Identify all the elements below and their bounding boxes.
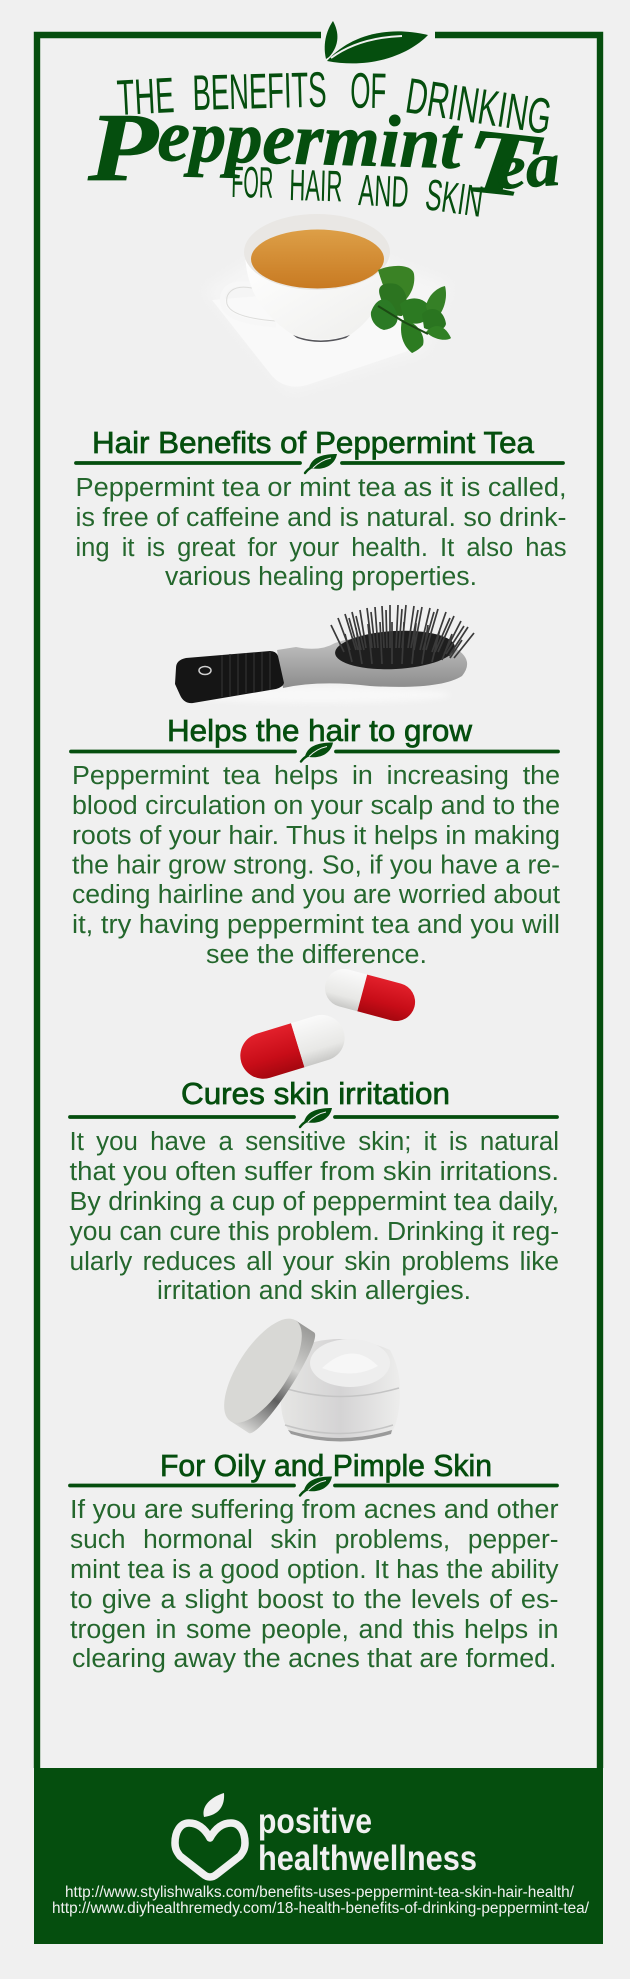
heading: hair growth: Helps the hair to grow bbox=[167, 714, 473, 748]
illustration: cream jar bbox=[209, 1307, 400, 1442]
divider: skin irritation bbox=[70, 1108, 557, 1127]
illustration: tea cup with mint bbox=[205, 214, 451, 392]
text block: oily skin: If you are suffering from acnes and other bbox=[70, 1496, 559, 1524]
grip ribs bbox=[222, 652, 270, 697]
title line 1: OF bbox=[350, 63, 387, 119]
title line 2: script: P bbox=[87, 94, 159, 202]
text block: hair growth bbox=[72, 762, 560, 969]
text block: oily skin: clearing away the acnes that are formed. bbox=[72, 1645, 556, 1673]
brush grip bbox=[175, 651, 284, 703]
brush cushion bbox=[334, 628, 456, 672]
source links bbox=[52, 1884, 590, 1917]
text block: hair growth: ceding hairline and you are worried about bbox=[72, 881, 560, 909]
text block: oily skin: such hormonal skin problems, pepper- bbox=[70, 1526, 558, 1554]
title line 2: script: eppermint bbox=[157, 95, 464, 185]
title line 2: script: T bbox=[460, 108, 547, 218]
text block: hair benefits: is free of caffeine and is natural. so drink- bbox=[76, 504, 566, 532]
text block: oily skin: mint tea is a good option. It has the ability bbox=[70, 1556, 559, 1584]
icon: apple heart logo bbox=[175, 1793, 245, 1877]
text block: oily skin bbox=[70, 1496, 559, 1673]
text block: hair growth: Peppermint tea helps in increasing the bbox=[72, 762, 560, 790]
logo wordmark bbox=[258, 1802, 477, 1878]
title line 2: script bbox=[87, 94, 562, 218]
bristles bbox=[331, 605, 474, 664]
heading: oily skin: For Oily and Pimple Skin bbox=[160, 1449, 492, 1483]
text block: hair growth: blood circulation on your scalp and to the bbox=[72, 792, 560, 820]
saucer bbox=[205, 230, 450, 392]
text block: skin irritation: ularly reduces all your skin problems like bbox=[70, 1248, 559, 1276]
illustration: hair brush bbox=[175, 605, 474, 703]
title line 1 bbox=[116, 62, 555, 145]
heading: skin irritation: Cures skin irritation bbox=[181, 1077, 450, 1111]
text block: skin irritation: It you have a sensitive skin; it is natural bbox=[70, 1128, 559, 1156]
brush body bbox=[277, 634, 467, 688]
text block: hair benefits: Peppermint tea or mint tea as it is called, bbox=[76, 474, 566, 502]
heading: hair benefits: Hair Benefits of Peppermint Tea bbox=[92, 426, 534, 460]
illustration: capsules bbox=[235, 965, 419, 1084]
title line 1: THE bbox=[116, 67, 175, 126]
mint sprig bbox=[371, 266, 451, 353]
text block: hair growth: it, try having peppermint tea and you will bbox=[72, 911, 560, 939]
title bbox=[87, 62, 562, 227]
grip logo bbox=[199, 666, 211, 674]
footer band bbox=[34, 1768, 603, 1944]
text block: skin irritation: you can cure this problem. Drinking it reg- bbox=[70, 1218, 559, 1246]
title line 3 bbox=[231, 158, 486, 227]
text block: skin irritation bbox=[70, 1128, 559, 1305]
logo wordmark: positive bbox=[258, 1802, 372, 1841]
capsule upper bbox=[321, 965, 419, 1025]
title line 3: SKIN bbox=[423, 170, 486, 227]
text block: oily skin: trogen in some people, and this helps in bbox=[70, 1616, 558, 1644]
cup rim bbox=[244, 214, 390, 290]
source links: http://www.stylishwalks.com/benefits-uses-peppermint-tea-skin-hair-health/ bbox=[65, 1884, 575, 1901]
green page frame bbox=[37, 35, 600, 1768]
divider: oily skin bbox=[70, 1476, 557, 1496]
title line 3: AND bbox=[358, 166, 410, 217]
text block: hair benefits: ing it is great for your health. It also has bbox=[76, 534, 566, 562]
text block: skin irritation: irritation and skin allergies. bbox=[157, 1277, 471, 1305]
divider: hair benefits bbox=[76, 454, 563, 473]
cup body bbox=[245, 252, 390, 340]
cup handle bbox=[222, 284, 276, 325]
text block: hair growth: see the difference. bbox=[206, 941, 427, 969]
text block: hair benefits: various healing properties. bbox=[165, 563, 477, 591]
text block: hair growth: the hair grow strong. So, if you have a re- bbox=[72, 852, 560, 880]
jar body bbox=[281, 1339, 400, 1440]
title line 2: script: ea bbox=[493, 131, 562, 203]
capsule lower bbox=[235, 1009, 350, 1084]
title line 1: BENEFITS bbox=[192, 62, 327, 121]
source links: http://www.diyhealthremedy.com/18-health-benefits-of-drinking-peppermint-tea/ bbox=[52, 1900, 590, 1917]
text block: skin irritation: By drinking a cup of peppermint tea daily, bbox=[70, 1188, 559, 1216]
cream bbox=[310, 1339, 390, 1387]
text block: hair growth: roots of your hair. Thus it helps in making bbox=[72, 822, 560, 850]
text block: oily skin: to give a slight boost to the levels of es- bbox=[70, 1586, 558, 1614]
logo wordmark: healthwellness bbox=[258, 1839, 477, 1878]
divider: hair growth bbox=[71, 742, 558, 762]
title line 3: HAIR bbox=[289, 161, 343, 211]
title line 3: FOR bbox=[231, 158, 274, 208]
icon: title leaf bbox=[325, 21, 428, 63]
text block: hair benefits bbox=[76, 474, 566, 591]
jar lid bbox=[209, 1307, 322, 1438]
tea bbox=[251, 230, 384, 288]
text block: skin irritation: that you often suffer from skin irritations. bbox=[70, 1158, 559, 1186]
lid band bbox=[230, 1320, 322, 1438]
lid top bbox=[209, 1307, 317, 1435]
